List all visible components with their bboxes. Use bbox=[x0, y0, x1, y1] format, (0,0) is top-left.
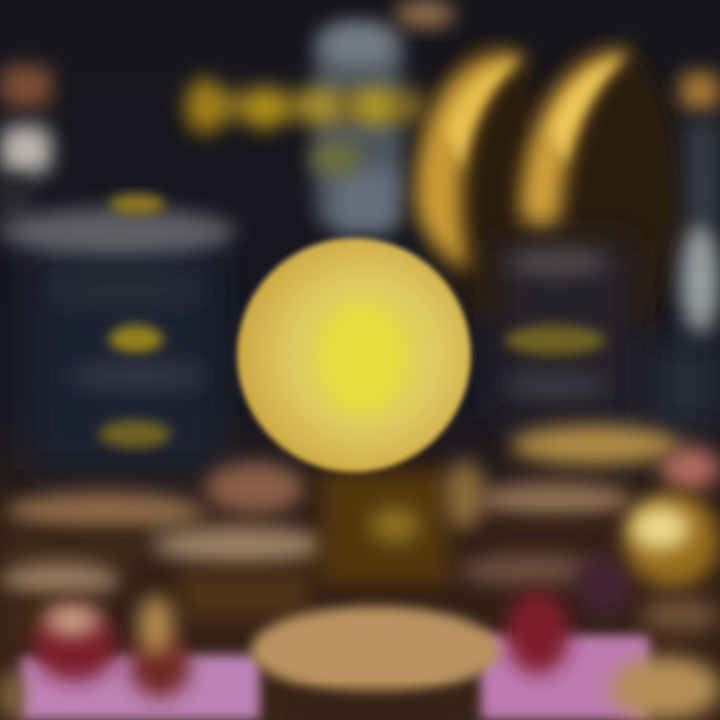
right arches bbox=[415, 42, 678, 330]
gold coin bbox=[237, 238, 471, 472]
left pillar: cap bbox=[0, 208, 236, 256]
pink table surface bbox=[20, 635, 650, 720]
right pillar bbox=[495, 240, 635, 420]
golden apple right bbox=[610, 492, 720, 720]
left arch highlight bbox=[415, 52, 530, 270]
left pillar: gold marks bbox=[109, 194, 165, 214]
blurred heading bbox=[185, 78, 425, 134]
red fruit left bbox=[33, 595, 190, 697]
top centre bottle bbox=[309, 0, 455, 230]
far-right object bbox=[650, 72, 720, 430]
stacked pastries right bbox=[458, 425, 720, 586]
stacked pastries left bbox=[0, 462, 328, 720]
top-left object bbox=[0, 65, 52, 228]
left arch body bbox=[420, 42, 545, 320]
right arch highlight bbox=[520, 48, 635, 228]
left pillar bbox=[0, 194, 236, 470]
coin pedestal bbox=[320, 460, 485, 585]
red fruit right bbox=[506, 553, 635, 674]
coin symbol bbox=[320, 303, 404, 413]
front plate bbox=[251, 606, 499, 720]
right arch body bbox=[520, 44, 678, 330]
